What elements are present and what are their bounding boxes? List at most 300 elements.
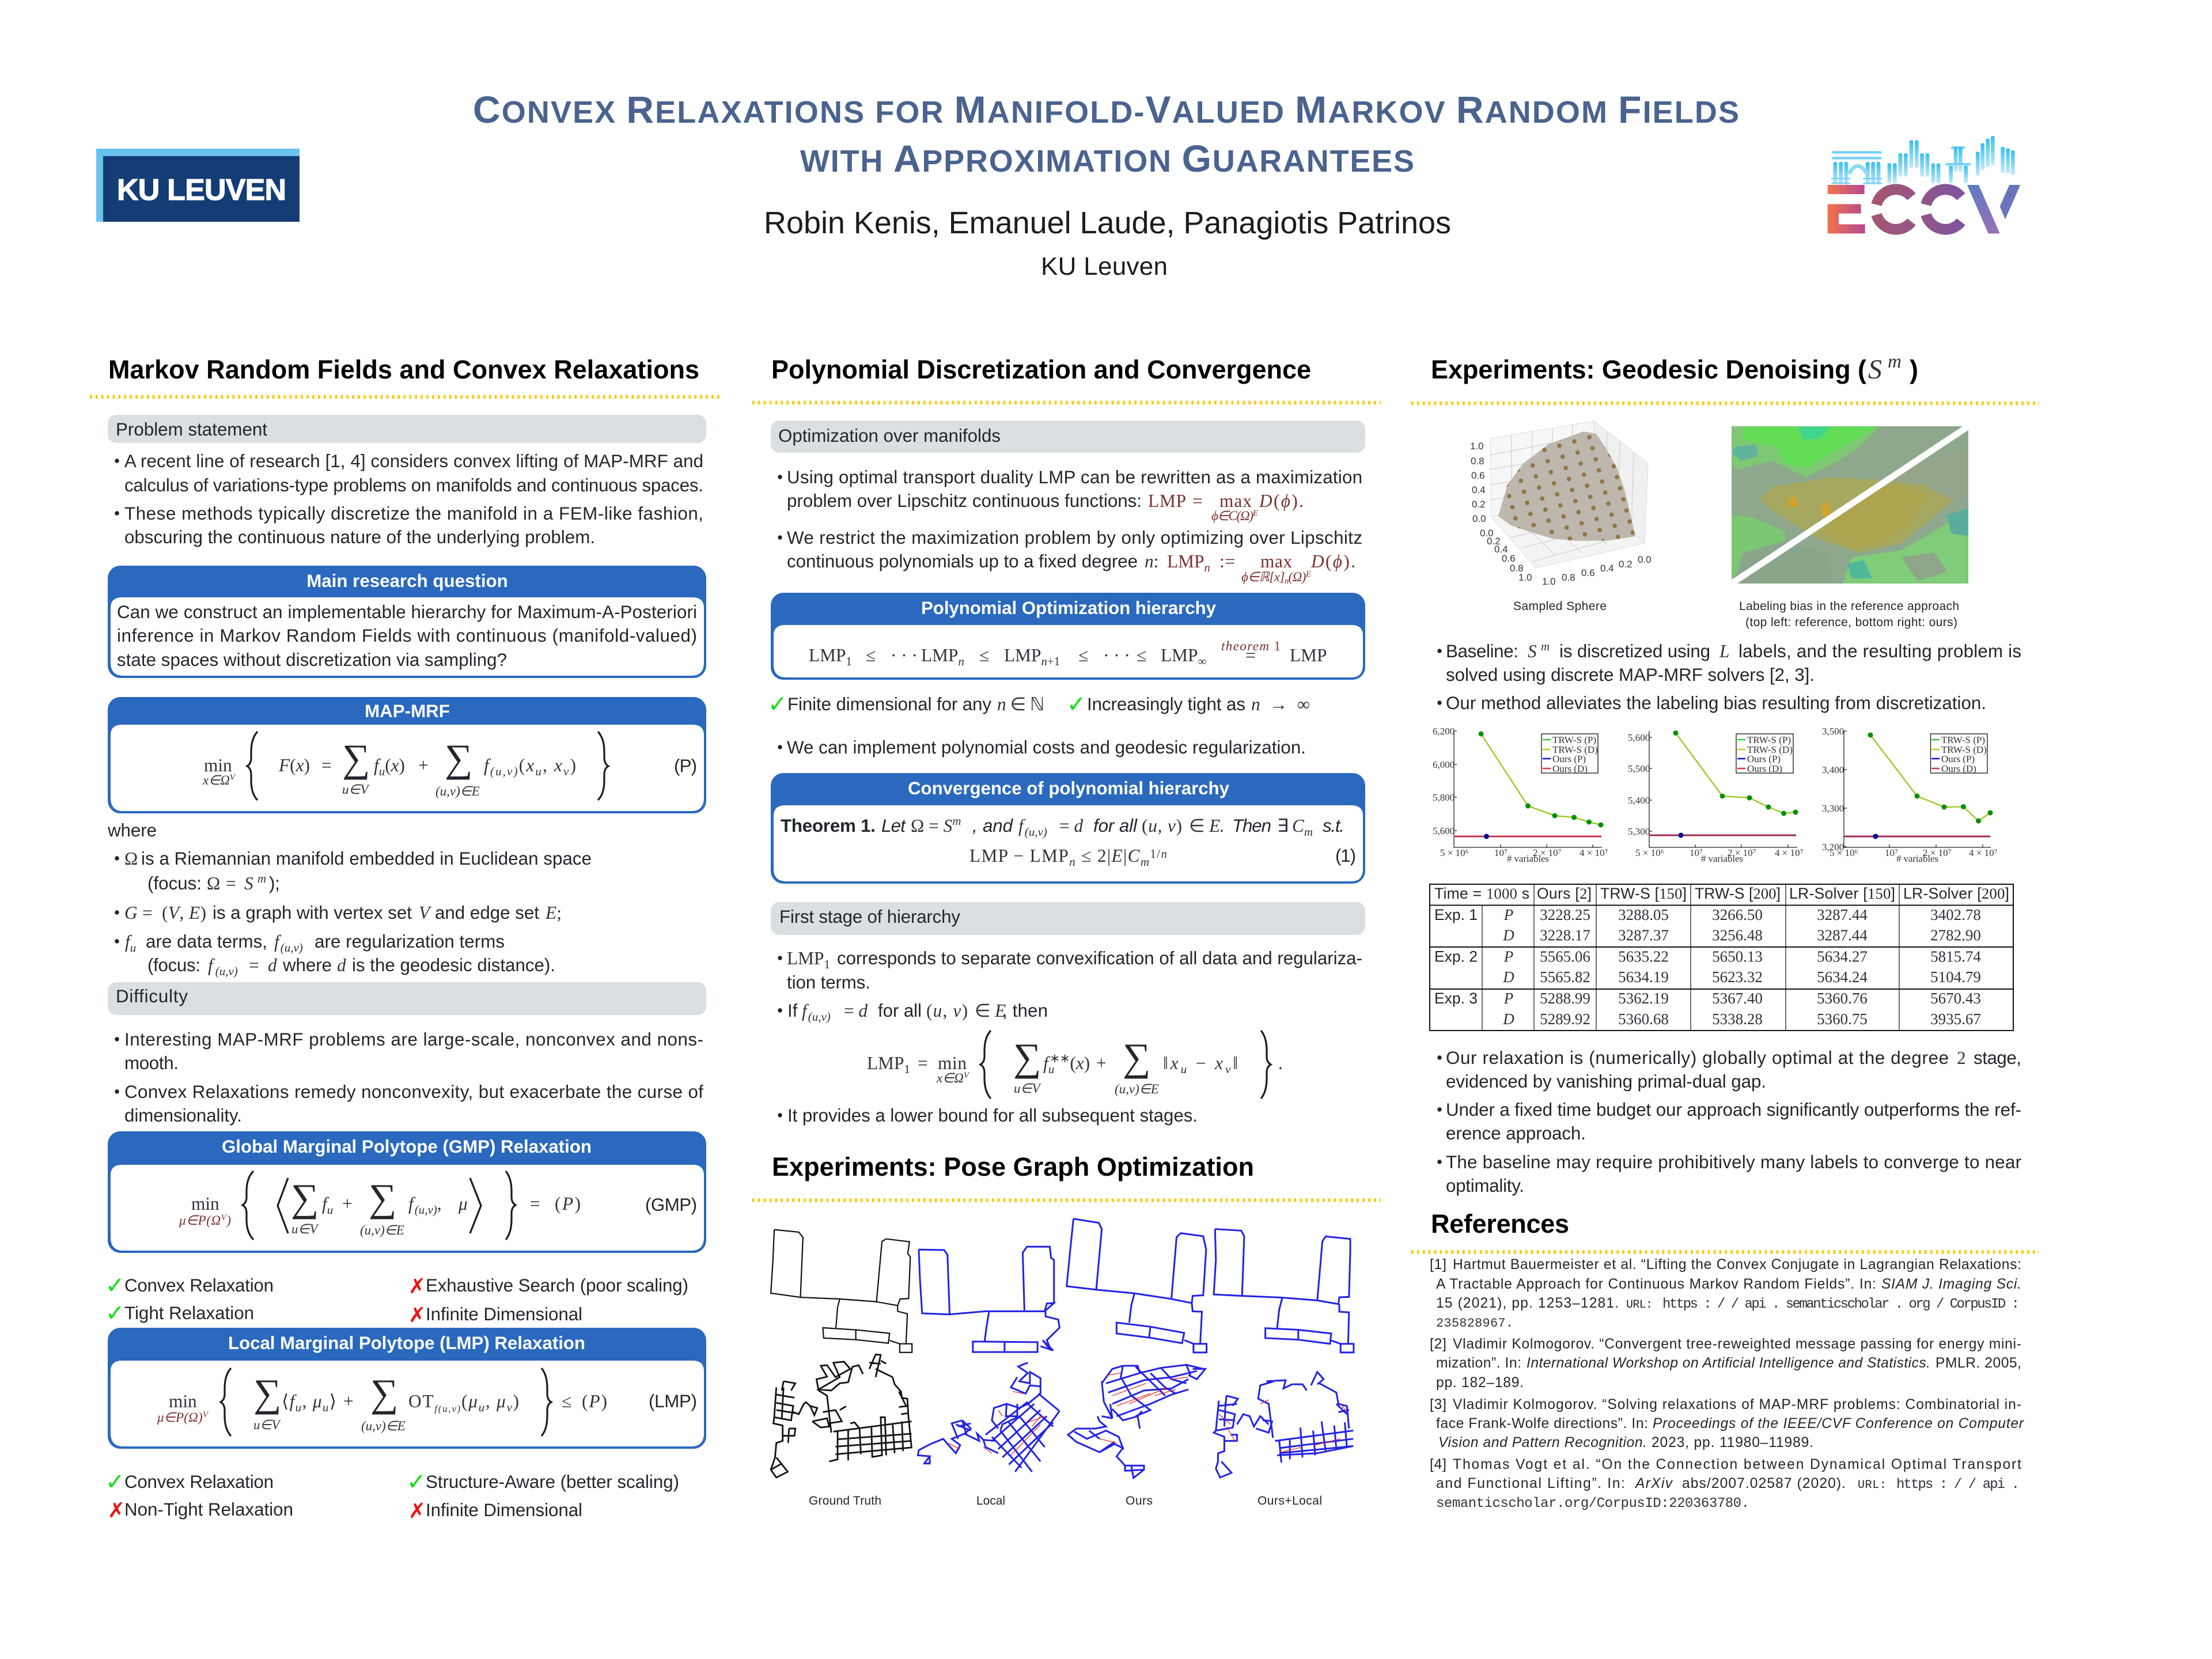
reference 4: and Functional Lifting”. In:: [1436, 1476, 1625, 1491]
callout: GMP relaxation formula: f: [408, 1194, 416, 1214]
heading: Polynomial Discretization: Polynomial Discretization and Convergence: [771, 355, 1311, 384]
callout: LMP relaxation formula: u∈V: [253, 1418, 282, 1432]
text block: difficulty bullets: Interesting MAP-MRF problems are large-scale, nonconvex and nons-: [124, 1029, 703, 1050]
text block: problem statement bullets: These methods typically discretize the manifold in a FEM-like fashion,: [124, 503, 703, 524]
callout: Convergence of polynomial hierarchy: ≤ 2|: [1076, 846, 1111, 866]
text block: first stage bullets: x): [1076, 1053, 1090, 1073]
text block: optimization bullets: =: [1192, 491, 1203, 511]
callout: Polynomial Optimization hierarchy: ≤: [866, 645, 876, 665]
callout: Convergence of polynomial hierarchy: 1/: [1150, 847, 1160, 861]
chart: convergence experiment 3: 10⁷: [1885, 847, 1898, 858]
callout: LMP relaxation formula: +: [343, 1391, 354, 1411]
table: results at time 1000 s: D: [1502, 926, 1514, 944]
callout: MAP-MRF formula: ): [570, 755, 576, 775]
reference 3: Vision and Pattern Recognition.: [1438, 1435, 1647, 1450]
table: results at time 1000 s: D: [1502, 1010, 1514, 1028]
chart: convergence experiment 1: # variables: [1507, 853, 1549, 864]
callout: Polynomial Optimization hierarchy: LMP: [1161, 645, 1198, 665]
pros and cons: LMP: Infinite Dimensional: [426, 1500, 582, 1520]
chart: convergence experiment 2: [1628, 730, 1804, 864]
text block: problem statement bullets: obscuring the continuous nature of the underlying problem.: [124, 527, 595, 547]
text block: difficulty bullets: mooth.: [124, 1053, 179, 1073]
subheading: First stage of hierarchy: [771, 902, 1365, 935]
callout: MAP-MRF formula: [108, 697, 706, 813]
callout: Main research question: Main research question: [306, 571, 508, 591]
callout: Main research question: Can we construct an implementable hierarchy for Maximum-A-Posteriori: [117, 602, 697, 622]
text block: first stage bullets: ‖x: [1163, 1053, 1179, 1073]
text block: first stage bullets: min: [938, 1053, 967, 1073]
table: results at time 1000 s: 3287.37: [1618, 926, 1669, 944]
subheading: Problem statement: [108, 415, 706, 443]
text block: optimization bullets: (Ω): [1289, 570, 1306, 584]
text block: where definitions: (focus:: [147, 873, 202, 893]
heading: Geodesic Denoising: ): [1910, 355, 1918, 384]
callout: LMP relaxation formula: ⟨f: [282, 1391, 294, 1411]
callout: Convergence of polynomial hierarchy: Convergence of polynomial hierarchy: [908, 778, 1230, 798]
text block: where definitions: d: [337, 955, 346, 975]
table: results at time 1000 s: D: [1502, 968, 1514, 986]
callout: MAP-MRF formula: v: [563, 764, 569, 778]
callout: MAP-MRF formula: u: [535, 764, 541, 778]
table: results at time 1000 s: 3402.78: [1930, 906, 1981, 923]
chart: sampled sphere 3D plot: 0.2: [1472, 499, 1486, 510]
callout: Convergence of polynomial hierarchy: E|C: [1112, 846, 1140, 866]
pros: hierarchy properties: n → ∞: [1251, 694, 1310, 714]
text block: where definitions: f: [274, 931, 282, 952]
chart: convergence experiment 3: TRW-S (D): [1941, 744, 1987, 755]
callout: GMP relaxation formula: (u,v)∈E: [360, 1223, 404, 1237]
callout: Polynomial Optimization hierarchy: Polynomial Optimization hierarchy: [921, 598, 1217, 618]
pros: hierarchy properties: ✓: [768, 691, 787, 718]
panel: Polynomial Discretization and Convergence: [752, 355, 1381, 1126]
callout: LMP relaxation formula: (: [461, 1391, 467, 1411]
pros and cons: LMP: Convex Relaxation: [124, 1472, 274, 1492]
panel: References: [1411, 1209, 2039, 1512]
pose graph: local: [918, 1247, 1059, 1472]
chart: convergence experiment 1: [1433, 726, 1608, 864]
text block: first stage bullets: x∈Ω: [937, 1071, 964, 1085]
text block: where definitions: is a Riemannian manifold embedded in Euclidean space: [141, 849, 592, 869]
reference 4: URL:: [1858, 1479, 1887, 1492]
table: results at time 1000 s: 5338.28: [1712, 1010, 1763, 1028]
subheading: Optimization over manifolds: [771, 421, 1365, 453]
text block: optimization bullets: max: [1260, 551, 1292, 571]
callout: LMP relaxation formula: μ: [496, 1391, 506, 1411]
reference 1: Hartmut Bauermeister et al. “Lifting the Convex Conjugate in Lagrangian Relaxations:: [1453, 1257, 2021, 1272]
table: results at time 1000 s: 3288.05: [1618, 906, 1669, 923]
chart: convergence experiment 3: 3,500: [1822, 726, 1844, 737]
callout: Convergence of polynomial hierarchy: ∃: [1277, 816, 1289, 836]
callout: Polynomial Optimization hierarchy: ≤: [1137, 645, 1146, 665]
chart: sampled sphere 3D plot: 0.0: [1480, 528, 1494, 539]
callout: Polynomial Optimization hierarchy: LMP: [1004, 645, 1041, 665]
text block: first stage bullets: V: [964, 1071, 970, 1080]
callout: GMP relaxation formula: Global Marginal Polytope (GMP) Relaxation: [222, 1137, 592, 1157]
text block: where definitions: where: [282, 955, 332, 975]
pros and cons: LMP: ✗: [408, 1499, 426, 1523]
affiliation: KU Leuven: [1041, 252, 1168, 281]
subheading: Difficulty: [108, 982, 706, 1015]
table: results at time 1000 s: Exp. 2: [1434, 948, 1478, 965]
text block: where definitions: are data terms,: [146, 931, 267, 952]
callout: MAP-MRF formula: f: [484, 755, 491, 775]
pose graph: ground truth: [771, 1230, 912, 1478]
text block: where definitions: are regularization terms: [315, 931, 505, 952]
chart: sampled sphere 3D plot: 0.2: [1619, 559, 1633, 570]
callout: GMP relaxation formula: =: [530, 1194, 540, 1214]
table: results at time 1000 s: 5634.19: [1618, 968, 1669, 986]
callout: GMP relaxation formula: μ: [458, 1194, 468, 1214]
table: results at time 1000 s: 5288.99: [1540, 990, 1590, 1007]
chart: sampled sphere 3D plot: 0.8: [1471, 456, 1484, 467]
callout: LMP relaxation formula: μ: [468, 1391, 478, 1411]
pros: hierarchy properties: n ∈ ℕ: [997, 694, 1044, 714]
heading: Pose Graph Optimization: Experiments: Pose Graph Optimization: [772, 1152, 1254, 1181]
callout: GMP relaxation formula: (GMP): [645, 1195, 697, 1215]
reference 1: 235828967.: [1436, 1316, 1513, 1331]
callout: Convergence of polynomial hierarchy: = d: [1059, 816, 1083, 836]
text block: baseline bullets: is discretized using: [1559, 641, 1710, 661]
reference 3: [3]: [1430, 1397, 1446, 1412]
callout: MAP-MRF formula: x∈Ω: [203, 773, 230, 787]
reference 4: semanticscholar.org/CorpusID:220363780.: [1436, 1496, 1749, 1512]
figure: labeling bias denoising image: [1732, 426, 1968, 584]
text block: first stage bullets: tion terms.: [787, 972, 870, 993]
table: results at time 1000 s: 5360.68: [1618, 1010, 1669, 1028]
reference 4: [1430, 1457, 2021, 1512]
table: results at time 1000 s: TRW-S [150]: [1600, 885, 1687, 902]
chart: convergence experiment 2: Ours (P): [1747, 753, 1781, 764]
callout: MAP-MRF formula: (u,v): [490, 764, 518, 778]
chart: pose graph trajectories: [771, 1219, 1354, 1478]
callout: Convergence of polynomial hierarchy: and: [983, 816, 1014, 836]
callout: MAP-MRF formula: +: [418, 755, 429, 775]
table: results at time 1000 s: 5670.43: [1930, 990, 1981, 1007]
text block: optimization bullets: Using optimal transport duality LMP can be rewritten as a maximization: [787, 467, 1362, 487]
callout: Polynomial Optimization hierarchy: · · ·: [1103, 645, 1130, 665]
chart: sampled sphere 3D plot: 0.0: [1638, 554, 1652, 565]
text block: where definitions: f: [125, 931, 132, 952]
callout: Convergence of polynomial hierarchy: f: [1018, 816, 1026, 836]
table: results at time 1000 s: Ours [2]: [1537, 885, 1592, 902]
callout: LMP relaxation formula: V: [203, 1410, 209, 1419]
heading: Geodesic Denoising: m: [1888, 351, 1902, 372]
callout: MAP-MRF formula: x: [554, 755, 562, 775]
text block: result bullets: Under a fixed time budget our approach significantly outperforms the ref-: [1446, 1100, 2021, 1120]
reference 1: A Tractable Approach for Continuous Markov Random Fields”. In:: [1436, 1277, 1876, 1292]
chart: sampled sphere 3D plot: 0.0: [1472, 513, 1486, 524]
text block: where definitions: (u,v): [215, 964, 238, 978]
callout: Convergence of polynomial hierarchy: [771, 773, 1365, 884]
text block: where definitions: );: [269, 873, 280, 893]
title: [473, 88, 1739, 180]
callout: MAP-MRF formula: x: [525, 755, 534, 775]
pose graph: ours plus local: [1214, 1229, 1354, 1478]
chart: sampled sphere 3D plot: 0.4: [1494, 544, 1508, 555]
text block: optimization bullets: [778, 467, 1362, 586]
reference 4: ArXiv: [1634, 1476, 1673, 1491]
callout: MAP-MRF formula: (u,v)∈E: [435, 784, 480, 798]
panel: Markov Random Fields and Convex Relaxations: [90, 355, 722, 1523]
text block: first stage bullets: f: [1043, 1053, 1051, 1073]
chart: convergence experiment 2: Ours (D): [1747, 763, 1782, 774]
text block: result bullets: Our relaxation is (numerically) globally optimal at the degree: [1446, 1048, 1949, 1068]
pros: hierarchy properties: Increasingly tight as: [1087, 694, 1245, 714]
text block: optimization bullets: LMP: [1167, 551, 1204, 571]
callout: Polynomial Optimization hierarchy: · · ·: [891, 645, 918, 665]
reference 2: International Workshop on Artificial Intelligence and Statistics.: [1527, 1355, 1930, 1371]
chart: convergence experiment 3: 2 × 10⁷: [1923, 847, 1952, 858]
table: results at time 1000 s: 5362.19: [1618, 990, 1669, 1007]
text block: first stage bullets: If: [787, 1001, 798, 1021]
reference 4: abs/2007.02587 (2020).: [1682, 1476, 1846, 1491]
callout: MAP-MRF formula: (P): [674, 756, 697, 776]
callout: LMP relaxation formula: u: [296, 1400, 301, 1414]
callout: LMP relaxation formula: μ: [312, 1391, 322, 1411]
logo: ECCV: [1828, 136, 2020, 233]
chart: convergence experiment 2: 5 × 10⁶: [1635, 847, 1664, 858]
pros and cons: GMP: ✗: [408, 1304, 426, 1327]
chart: convergence experiment 1: Ours (P): [1552, 753, 1586, 764]
text block: optimization bullets: n: [1285, 577, 1289, 586]
callout: Polynomial Optimization hierarchy: theorem 1: [1221, 639, 1281, 653]
text block: first stage bullets: for all: [878, 1001, 922, 1021]
callout: Convergence of polynomial hierarchy: LMP − LMP: [969, 846, 1069, 866]
figure labels: pose graph: Ground Truth: [809, 1494, 881, 1508]
table: results at time 1000 s: Time = 1000 s: [1434, 885, 1529, 902]
chart: sampled sphere 3D plot: 0.8: [1562, 572, 1575, 583]
callout: LMP relaxation formula: (LMP): [649, 1391, 697, 1411]
text block: baseline bullets: m: [1541, 639, 1550, 653]
table: results at time 1000 s: 5565.06: [1540, 948, 1590, 965]
table: results at time 1000 s: 5634.24: [1817, 968, 1868, 986]
subheading: Difficulty: Difficulty: [116, 986, 188, 1006]
text block: first stage bullets: u: [1181, 1062, 1187, 1076]
reference 1: SIAM J. Imaging Sci.: [1881, 1277, 2021, 1292]
chart: convergence experiment 3: 4 × 10⁷: [1969, 847, 1998, 858]
text block: result bullets: erence approach.: [1446, 1123, 1586, 1143]
callout: Convergence of polynomial hierarchy: C: [1292, 816, 1305, 836]
callout: MAP-MRF formula: (: [385, 755, 391, 775]
callout: Convergence of polynomial hierarchy: m: [952, 814, 961, 828]
callout: Convergence of polynomial hierarchy: (1): [1335, 846, 1356, 866]
reference 2: mization”. In:: [1436, 1355, 1521, 1371]
callout: Polynomial Optimization hierarchy: LMP: [809, 645, 846, 665]
figure labels: pose graph: [809, 1494, 1322, 1508]
text block: optimization bullets: E: [1305, 570, 1311, 579]
table: results at time 1000 s: [1430, 884, 2013, 1031]
text block: first stage bullets: f: [802, 1001, 809, 1021]
text block: optimization bullets: D(ϕ).: [1259, 491, 1304, 511]
text block: first stage bullets: ∈ E: [975, 1001, 1006, 1021]
figure labels: pose graph: Ours+Local: [1257, 1494, 1322, 1508]
text block: where definitions: f: [208, 955, 215, 975]
callout: LMP relaxation formula: ): [513, 1391, 519, 1411]
text block: optimization bullets: ϕ∈ℝ[x]: [1241, 570, 1285, 584]
callout: Convergence of polynomial hierarchy: ,: [972, 816, 978, 836]
table: results at time 1000 s: 5360.76: [1817, 990, 1868, 1007]
callout: Main research question: [108, 566, 706, 678]
text block: first stage bullets: .: [1278, 1053, 1283, 1073]
panel: Experiments Geodesic Denoising: [1411, 351, 2039, 1196]
chart: convergence experiment 3: # variables: [1896, 853, 1938, 864]
callout: Convergence of polynomial hierarchy: Let: [881, 816, 906, 836]
table: results at time 1000 s: 3287.44: [1817, 906, 1868, 923]
text block: where definitions: =: [226, 873, 236, 893]
text block: where definitions: [107, 820, 592, 978]
callout: Convergence of polynomial hierarchy: s.t.: [1323, 816, 1344, 836]
pros and cons: LMP: ✗: [108, 1499, 125, 1522]
callout: GMP relaxation formula: min: [191, 1194, 219, 1214]
text block: optimization bullets: n:: [1145, 551, 1158, 571]
text block: where definitions: =: [249, 955, 259, 975]
figure labels: denoising: [1513, 600, 1959, 629]
chart: convergence experiment 1: 4 × 10⁷: [1580, 847, 1608, 858]
reference 2: [2]: [1430, 1336, 1446, 1352]
title: CONVEX RELAXATIONS FOR MANIFOLD-VALUED MARKOV RANDOM FIELDS: [473, 88, 1739, 131]
callout: Polynomial Optimization hierarchy: [771, 593, 1365, 680]
table: results at time 1000 s: Exp. 1: [1434, 906, 1478, 923]
text block: baseline bullets: labels, and the resulting problem is: [1738, 641, 2021, 661]
chart: convergence experiment 3: 5 × 10⁶: [1830, 847, 1858, 858]
reference 4: [4]: [1430, 1457, 1446, 1472]
text block: optimization bullets: :=: [1219, 551, 1235, 571]
pros and cons: GMP: ✗: [408, 1275, 426, 1298]
callout: MAP-MRF formula: u∈V: [342, 782, 370, 797]
table: results at time 1000 s: 3256.48: [1712, 926, 1763, 944]
table: results at time 1000 s: TRW-S [200]: [1695, 885, 1781, 902]
text block: first stage bullets: corresponds to separate convexification of all data and regulariza-: [837, 948, 1362, 968]
callout: GMP relaxation formula: ,: [437, 1194, 442, 1214]
callout: LMP relaxation formula: ,: [302, 1391, 312, 1411]
callout: GMP relaxation formula: V: [221, 1213, 228, 1222]
callout: GMP relaxation formula: ∑: [291, 1176, 319, 1219]
callout: MAP-MRF formula: u: [379, 764, 385, 778]
callout: MAP-MRF formula: (: [519, 755, 525, 775]
callout: GMP relaxation formula: μ∈P(Ω: [179, 1213, 221, 1228]
chart: convergence experiment 1: 5,600: [1433, 825, 1455, 836]
reference 3: Vladimir Kolmogorov. “Solving relaxations of MAP-MRF problems: Combinatorial in-: [1453, 1397, 2021, 1412]
text block: difficulty bullets: Convex Relaxations remedy nonconvexity, but exacerbate the curse of: [124, 1082, 703, 1102]
callout: MAP-MRF formula: ∑: [342, 736, 370, 780]
table: results at time 1000 s: 5104.79: [1930, 968, 1981, 986]
callout: Polynomial Optimization hierarchy: LMP: [1290, 645, 1327, 665]
text block: where definitions: V: [419, 903, 432, 923]
pros and cons: GMP: ✓: [105, 1272, 125, 1299]
callout: LMP relaxation formula: ⟩: [329, 1391, 336, 1411]
table: results at time 1000 s: 3228.25: [1540, 906, 1590, 923]
text block: where definitions: u: [130, 941, 136, 955]
chart: convergence experiment 1: Ours (D): [1552, 763, 1588, 774]
text block: first stage bullets: = d: [844, 1001, 868, 1021]
text block: difficulty bullets: [115, 1029, 703, 1126]
chart: sampled sphere 3D plot: [1470, 421, 1652, 587]
pros and cons: GMP: Tight Relaxation: [124, 1303, 254, 1323]
logo: KU Leuven: KU LEUVEN: [117, 173, 286, 207]
callout: Convergence of polynomial hierarchy: (u, v): [1142, 816, 1182, 836]
logo: KU Leuven: [96, 149, 300, 222]
text block: where definitions: m: [257, 872, 266, 885]
callout: LMP relaxation formula: (P): [582, 1391, 607, 1411]
reference 2: PMLR. 2005,: [1936, 1355, 2021, 1371]
table: results at time 1000 s: P: [1503, 948, 1513, 965]
text block: where definitions: (V, E): [162, 903, 206, 923]
subheading: Optimization over manifolds: Optimization over manifolds: [778, 426, 1001, 446]
callout: Polynomial Optimization hierarchy: ∞: [1198, 654, 1206, 668]
text block: where definitions: (focus:: [147, 955, 200, 975]
text block: result bullets: evidenced by vanishing primal-dual gap.: [1446, 1071, 1766, 1092]
text block: optimization bullets: We restrict the maximization problem by only optimizing over Lipschitz: [787, 528, 1362, 548]
text block: first stage bullets: +: [1096, 1053, 1107, 1073]
callout: Convergence of polynomial hierarchy: (u,v): [1025, 825, 1047, 839]
callout: Polynomial Optimization hierarchy: LMP: [921, 645, 958, 665]
callout: GMP relaxation formula: (u,v): [415, 1203, 437, 1217]
pros and cons: GMP: [105, 1272, 688, 1327]
text block: polynomial costs bullet: We can implement polynomial costs and geodesic regularization.: [787, 737, 1306, 757]
callout: Polynomial Optimization hierarchy: n: [1041, 654, 1047, 668]
callout: LMP relaxation formula: v: [506, 1400, 512, 1414]
heading: Geodesic Denoising: Experiments: Geodesic Denoising (: [1431, 355, 1866, 384]
chart: convergence experiment 2: 2 × 10⁷: [1728, 847, 1756, 858]
table: results at time 1000 s: 5635.22: [1618, 948, 1669, 965]
table: results at time 1000 s: 3935.67: [1930, 1010, 1981, 1028]
heading: References: References: [1431, 1209, 1569, 1238]
chart: convergence experiment 1: 6,000: [1433, 759, 1455, 770]
callout: LMP relaxation formula: ,: [486, 1391, 495, 1411]
pose graph: ours: [1067, 1219, 1207, 1478]
pros and cons: LMP: Structure-Aware (better scaling): [426, 1472, 679, 1492]
chart: convergence experiment 3: Ours (D): [1941, 763, 1976, 774]
text block: first stage bullets: ∗∗: [1050, 1051, 1070, 1065]
callout: GMP relaxation formula: [108, 1131, 706, 1253]
text block: where definitions: where: [107, 820, 157, 840]
text block: where definitions: S: [244, 873, 253, 893]
callout: LMP relaxation formula: (u,v)∈E: [361, 1419, 406, 1433]
chart: sampled sphere 3D plot: 0.6: [1502, 553, 1516, 564]
reference 3: face Frank-Wolfe directions”. In:: [1436, 1416, 1648, 1431]
callout: MAP-MRF formula: min: [204, 755, 232, 775]
text block: first stage bullets: LMP: [867, 1053, 904, 1073]
text block: where definitions: G: [124, 903, 138, 923]
chart: convergence experiment 1: TRW-S (P): [1552, 734, 1596, 745]
pros and cons: LMP: [105, 1469, 679, 1523]
table: results at time 1000 s: 3287.44: [1817, 926, 1868, 944]
callout: GMP relaxation formula: f: [322, 1194, 329, 1214]
text block: first stage bullets: (u,v)∈E: [1115, 1082, 1159, 1096]
chart: sampled sphere 3D plot: 0.4: [1600, 563, 1614, 574]
callout: Polynomial Optimization hierarchy: ≤: [1078, 645, 1088, 665]
text block: first stage bullets: (u, v): [926, 1001, 968, 1021]
table: results at time 1000 s: Exp. 3: [1434, 990, 1478, 1007]
chart: sampled sphere 3D plot: 1.0: [1542, 576, 1556, 587]
chart: convergence experiment 1: 2 × 10⁷: [1533, 847, 1562, 858]
text block: first stage bullets: ‖: [1233, 1053, 1238, 1073]
chart: sampled sphere 3D plot: 0.4: [1472, 484, 1486, 495]
callout: Convergence of polynomial hierarchy: m: [1141, 855, 1149, 869]
table: results at time 1000 s: 2782.90: [1930, 926, 1981, 944]
text block: optimization bullets: max: [1219, 491, 1252, 511]
text block: optimization bullets: LMP: [1148, 491, 1186, 511]
text block: first stage bullets: [778, 948, 1362, 1126]
callout: MAP-MRF formula: =: [321, 755, 332, 775]
pros: hierarchy properties: [768, 691, 1310, 718]
text block: problem statement bullets: A recent line of research [1, 4] considers convex lifting of MAP-MRF and: [124, 451, 703, 471]
callout: LMP relaxation formula: μ∈P(Ω): [157, 1410, 203, 1425]
subheading: Problem statement: Problem statement: [116, 419, 267, 440]
callout: LMP relaxation formula: Local Marginal Polytope (LMP) Relaxation: [228, 1333, 585, 1353]
chart: convergence experiment 2: 5,600: [1628, 732, 1650, 743]
text block: baseline bullets: solved using discrete MAP-MRF solvers [2, 3].: [1446, 665, 1815, 685]
